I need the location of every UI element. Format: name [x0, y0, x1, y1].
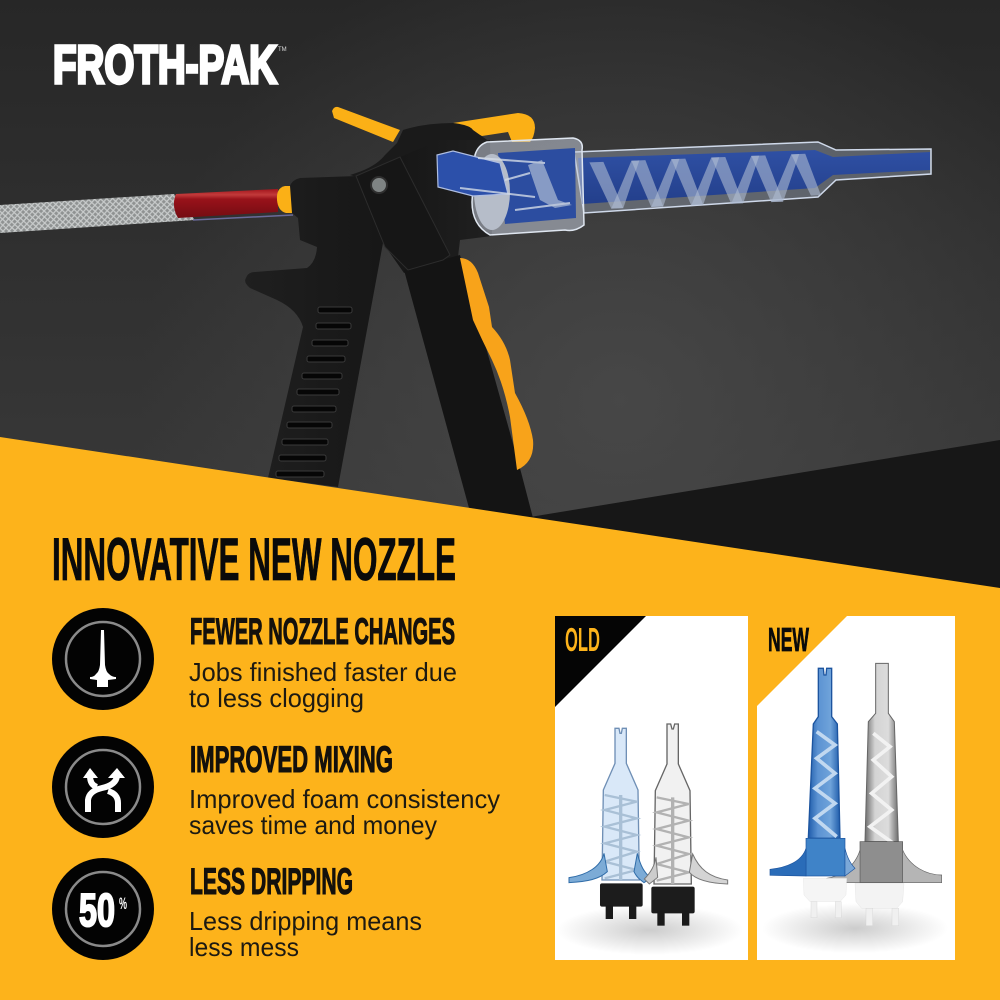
pivot screw — [371, 177, 387, 193]
subheading: IMPROVED MIXING — [190, 739, 393, 780]
description: saves time and money — [189, 810, 437, 840]
lever — [404, 255, 533, 518]
blue new nozzle — [770, 668, 855, 918]
lever plate — [356, 157, 450, 270]
icon: nozzle — [52, 608, 154, 710]
yellow top tabs — [332, 107, 535, 142]
gun body and rear handle — [245, 140, 492, 487]
yellow lower panel — [0, 437, 1000, 1000]
clear collar — [472, 138, 584, 235]
corner badge: new — [757, 616, 847, 706]
description — [189, 784, 500, 840]
description — [189, 906, 422, 962]
red hose connector — [174, 189, 278, 218]
icon: 50 percent: % — [119, 894, 127, 913]
subheading: LESS DRIPPING — [190, 861, 353, 902]
icon: 50 percent: 50 — [79, 884, 115, 936]
feature: less dripping — [52, 858, 422, 962]
mixing nozzle tube — [574, 142, 931, 213]
panel: new nozzle — [757, 616, 955, 960]
icon: crossing arrows — [52, 736, 154, 838]
heading: INNOVATIVE NEW NOZZLE — [52, 526, 456, 593]
logo: Froth-Pak: FROTH-PAK — [53, 35, 277, 95]
corner badge: new: NEW — [768, 621, 809, 658]
corner badge: old — [555, 616, 646, 707]
subheading: FEWER NOZZLE CHANGES — [190, 611, 455, 652]
icon: 50 percent — [52, 858, 154, 960]
description: Jobs finished faster due — [189, 657, 457, 687]
clear new nozzle — [827, 663, 942, 926]
hood — [350, 123, 490, 190]
blue old nozzle — [569, 728, 651, 919]
blue inlet — [437, 151, 508, 196]
panel: old nozzle — [555, 616, 748, 960]
hose — [0, 194, 195, 233]
old nozzles photo — [557, 724, 743, 955]
product: foam gun with nozzle — [0, 107, 931, 518]
nozzle spiral blades — [589, 153, 821, 209]
yellow lever grip — [460, 258, 533, 470]
description: to less clogging — [189, 683, 364, 713]
description: less mess — [189, 932, 299, 962]
description: Less dripping means — [189, 906, 422, 936]
description — [189, 657, 457, 713]
feature: fewer nozzle changes — [52, 608, 457, 713]
new nozzles photo — [762, 663, 948, 953]
corner badge: old: OLD — [565, 621, 600, 658]
yellow collar — [277, 186, 294, 213]
collar spiral — [460, 158, 570, 210]
logo: Froth-Pak: TM — [278, 47, 287, 53]
description: Improved foam consistency — [189, 784, 500, 814]
feature: improved mixing — [52, 736, 500, 840]
clear old nozzle — [644, 724, 728, 926]
dark floor plane — [530, 440, 1000, 600]
grip slots — [276, 307, 352, 477]
